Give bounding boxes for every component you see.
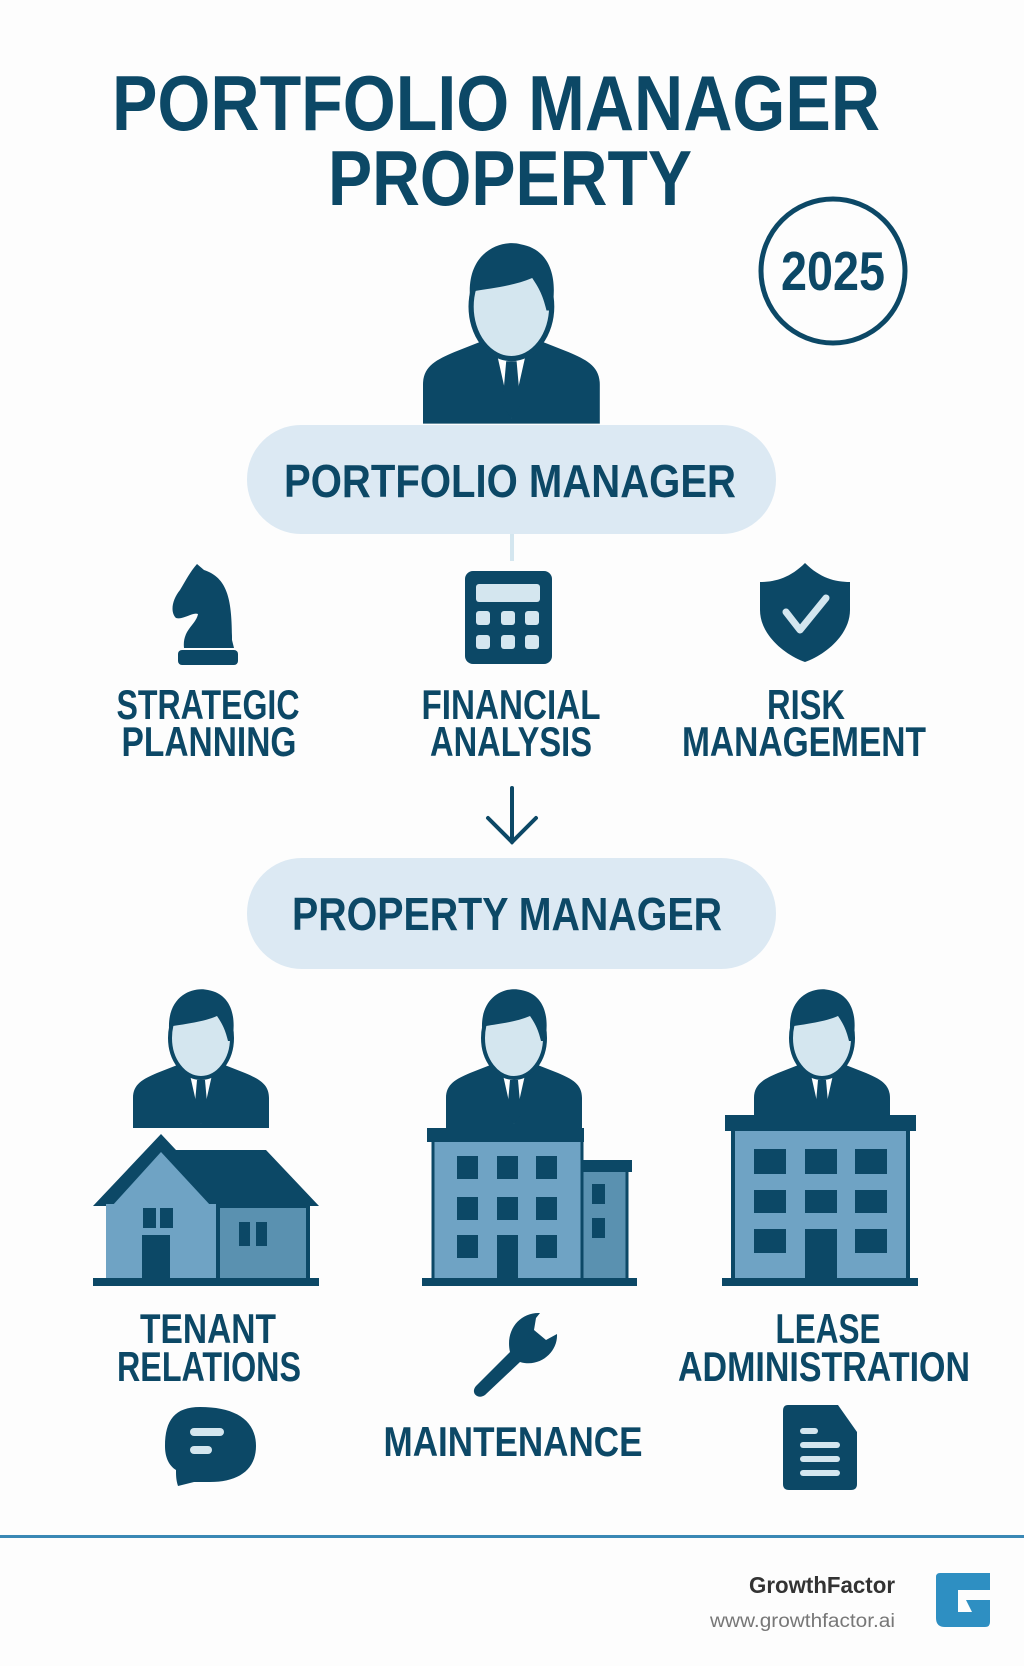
footer: brand text xyxy=(709,1572,895,1632)
label: financial analysis: ANALYSIS xyxy=(430,718,592,765)
label: lease administration xyxy=(678,1305,970,1390)
icon: document xyxy=(783,1405,857,1490)
footer: brand text: www.growthfactor.ai xyxy=(709,1611,895,1632)
icon: wrench xyxy=(474,1313,557,1397)
label: strategic planning: STRATEGIC xyxy=(116,681,300,728)
label: risk management xyxy=(682,681,926,765)
label: financial analysis: FINANCIAL xyxy=(422,681,600,728)
title xyxy=(112,59,880,222)
footer: brand text: GrowthFactor xyxy=(749,1572,895,1598)
badge: 2025: 2025 xyxy=(781,240,885,302)
icon: person with office building xyxy=(422,989,637,1286)
connector line xyxy=(510,533,514,561)
arrow down xyxy=(488,788,536,842)
label: lease administration: LEASE xyxy=(776,1305,880,1352)
pill: portfolio manager: PORTFOLIO MANAGER xyxy=(284,455,736,507)
label: tenant relations: TENANT xyxy=(140,1305,276,1352)
title: PROPERTY xyxy=(328,134,692,222)
pill: portfolio manager xyxy=(247,425,776,534)
label: risk management: RISK xyxy=(767,681,845,728)
icon: person with house xyxy=(93,989,319,1286)
label: tenant relations xyxy=(117,1305,301,1390)
title: PORTFOLIO MANAGER xyxy=(112,59,880,147)
footer divider xyxy=(0,1535,1024,1538)
icon: person with tower building xyxy=(722,989,918,1286)
icon: shield check xyxy=(760,563,850,662)
label: strategic planning: PLANNING xyxy=(122,718,296,765)
pill: property manager xyxy=(247,858,776,969)
badge: 2025 xyxy=(761,199,905,343)
icon: chat bubble xyxy=(165,1407,256,1486)
label: risk management: MANAGEMENT xyxy=(682,718,926,765)
logo: G xyxy=(936,1573,990,1627)
label: strategic planning xyxy=(116,681,300,765)
pill: property manager: PROPERTY MANAGER xyxy=(292,888,722,940)
label: tenant relations: RELATIONS xyxy=(117,1343,301,1390)
icon: calculator xyxy=(465,571,552,664)
icon: portfolio manager person xyxy=(423,243,600,424)
label: maintenance: MAINTENANCE xyxy=(384,1418,642,1465)
label: financial analysis xyxy=(422,681,600,765)
icon: chess knight xyxy=(173,564,238,665)
